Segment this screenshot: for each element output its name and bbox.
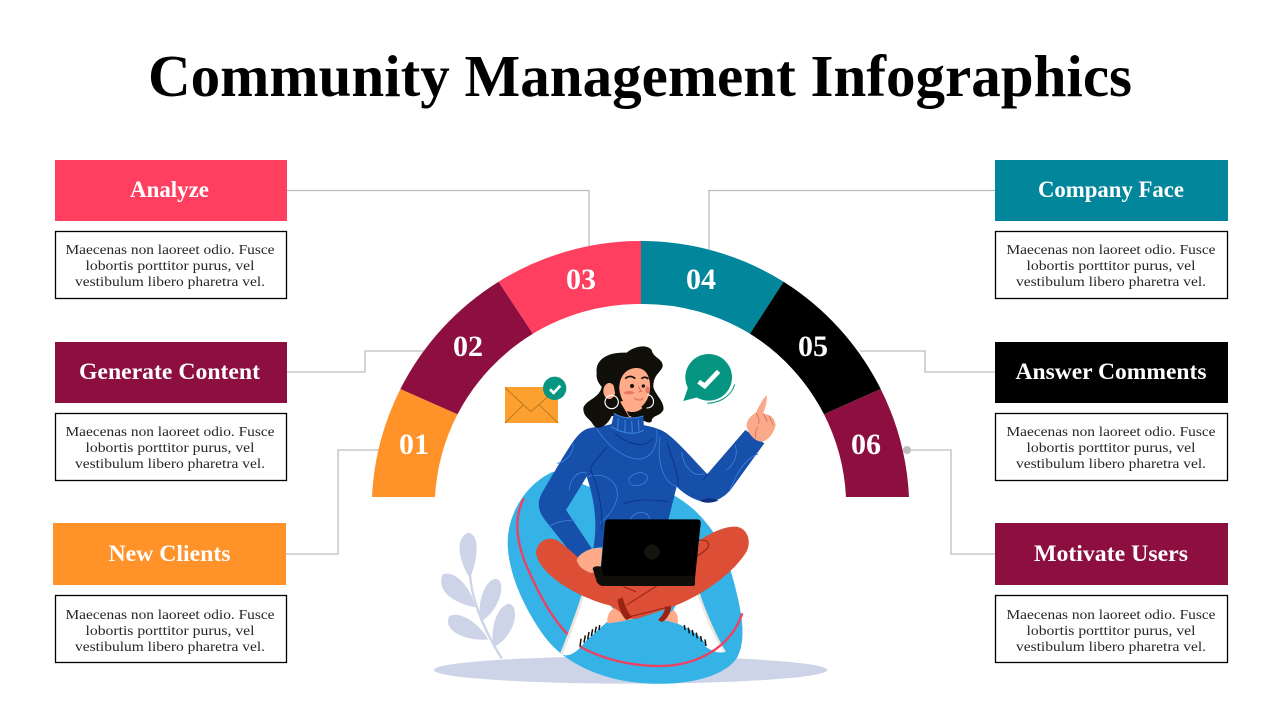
text block: new clients: lobortis porttitor purus, vel xyxy=(86,624,255,639)
text block: motivate users: lobortis porttitor purus, vel xyxy=(1026,624,1196,639)
text block: generate content: vestibulum libero pharetra vel. xyxy=(75,457,265,472)
segment 02 xyxy=(400,282,533,414)
panel: motivate users xyxy=(995,523,1228,662)
panel: analyze xyxy=(55,160,287,298)
seat front xyxy=(580,618,707,661)
text block: new clients xyxy=(56,596,286,662)
shoes xyxy=(561,592,725,655)
legs xyxy=(536,527,749,622)
sweater xyxy=(539,424,764,560)
segment 06 xyxy=(824,389,909,497)
text block: analyze: vestibulum libero pharetra vel. xyxy=(75,275,265,290)
heading: generate content xyxy=(55,342,287,403)
segment 03: 03 xyxy=(566,263,596,296)
illustration: woman on bean bag xyxy=(434,346,827,684)
heading: analyze xyxy=(55,160,287,221)
segment 01 xyxy=(372,389,458,497)
text block: new clients: vestibulum libero pharetra vel. xyxy=(75,640,265,655)
text block: company face: Maecenas non laoreet odio. Fusce xyxy=(1006,243,1216,258)
heading: new clients xyxy=(53,523,286,585)
heading: answer comments: Answer Comments xyxy=(1016,359,1207,384)
heading: new clients: New Clients xyxy=(108,541,231,566)
connector lines xyxy=(286,190,995,554)
text block: analyze xyxy=(56,232,286,298)
icon: plant xyxy=(441,533,515,658)
text block: motivate users xyxy=(996,596,1228,662)
text block: analyze: Maecenas non laoreet odio. Fusce xyxy=(66,243,274,258)
bean bag seam: front part xyxy=(580,613,742,666)
panel: new clients xyxy=(53,523,286,662)
text block: new clients: Maecenas non laoreet odio. Fusce xyxy=(66,608,274,623)
head and hair xyxy=(583,346,664,428)
text block: answer comments xyxy=(996,414,1228,480)
bean bag xyxy=(508,472,742,684)
icon: chat bubble with check xyxy=(683,354,735,403)
text block: answer comments: Maecenas non laoreet odio. Fusce xyxy=(1006,425,1216,440)
panel: company face xyxy=(995,160,1228,298)
text block: analyze: lobortis porttitor purus, vel xyxy=(86,259,255,274)
heading: answer comments xyxy=(995,342,1228,403)
text block: answer comments: lobortis porttitor purus, vel xyxy=(1026,441,1196,456)
segment 05: 05 xyxy=(798,330,828,363)
text block: company face: vestibulum libero pharetra vel. xyxy=(1016,275,1206,290)
ground shadow xyxy=(434,656,827,684)
icon: envelope with check badge xyxy=(505,377,566,423)
segment 01: 01 xyxy=(399,428,429,461)
text block: generate content: lobortis porttitor purus, vel xyxy=(86,441,255,456)
heading: company face xyxy=(995,160,1228,221)
segment 04 xyxy=(641,241,784,334)
shoe laces xyxy=(580,625,706,647)
heading: motivate users: Motivate Users xyxy=(1034,541,1188,566)
text block: answer comments: vestibulum libero pharetra vel. xyxy=(1016,457,1206,472)
ankles xyxy=(607,607,678,625)
hand on laptop xyxy=(577,548,602,573)
segment 03 xyxy=(499,241,641,334)
segment 04: 04 xyxy=(686,263,716,296)
laptop xyxy=(593,519,701,586)
text block: motivate users: vestibulum libero pharetra vel. xyxy=(1016,640,1206,655)
segment 02: 02 xyxy=(453,330,483,363)
text block: generate content: Maecenas non laoreet odio. Fusce xyxy=(66,425,274,440)
text block: motivate users: Maecenas non laoreet odio. Fusce xyxy=(1006,608,1216,623)
panel: generate content xyxy=(55,342,287,480)
title: Community Management Infographics xyxy=(148,43,1132,109)
text block: company face: lobortis porttitor purus, vel xyxy=(1026,259,1196,274)
semicircle chart xyxy=(372,241,909,497)
collar xyxy=(611,413,644,433)
panel: answer comments xyxy=(995,342,1228,480)
bean bag seam: left part xyxy=(517,498,568,635)
heading: generate content: Generate Content xyxy=(79,359,260,384)
heading: motivate users xyxy=(995,523,1228,585)
segment 06: 06 xyxy=(851,428,881,461)
segment 05 xyxy=(750,282,881,414)
heading: company face: Company Face xyxy=(1038,177,1184,202)
text block: company face xyxy=(996,232,1228,298)
icon: pointing hand xyxy=(747,395,776,442)
heading: analyze: Analyze xyxy=(130,177,209,202)
text block: generate content xyxy=(56,414,286,480)
